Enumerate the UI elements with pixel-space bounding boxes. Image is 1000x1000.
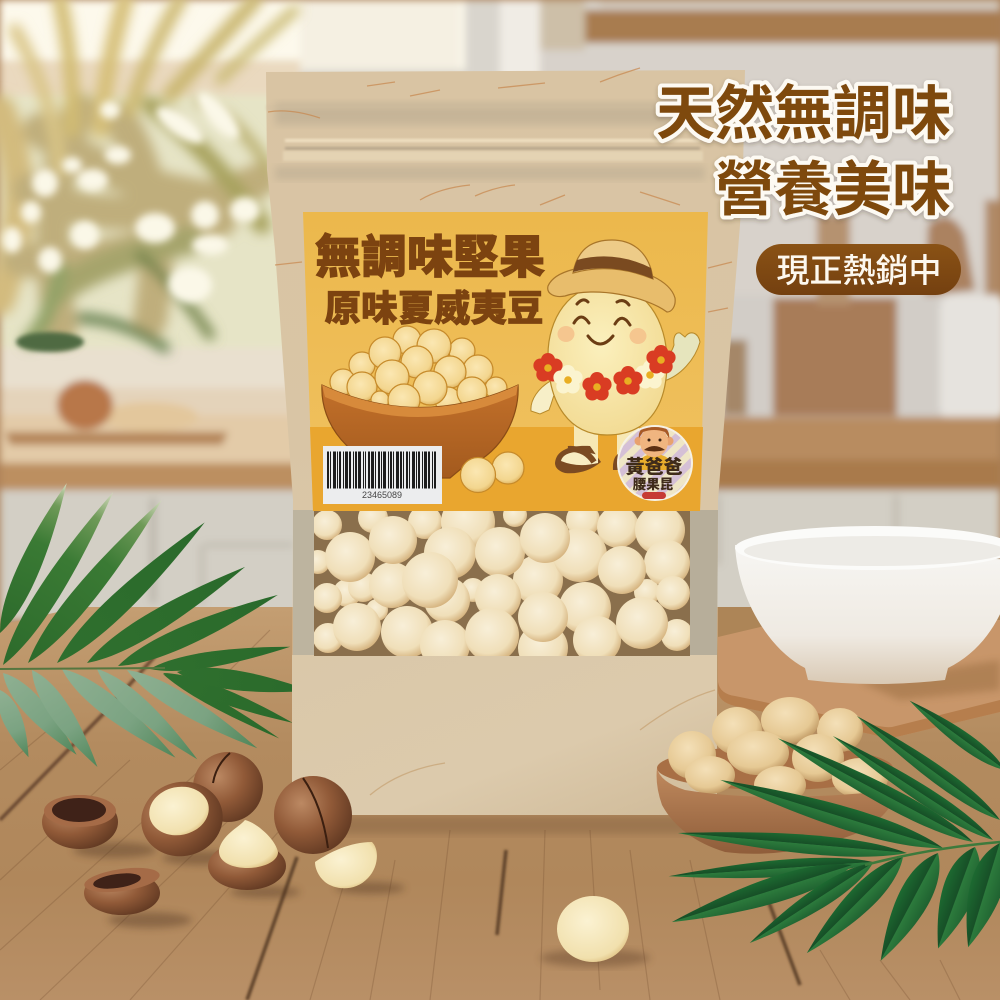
- cartoon bowl of nuts: [322, 326, 518, 478]
- bag body: [266, 70, 745, 815]
- small shell: [83, 864, 161, 915]
- tagline line 2: 營養美味: [715, 157, 951, 223]
- barcode: 23465089: [362, 490, 402, 500]
- cup shell with kernel: [208, 820, 286, 890]
- logo character: [634, 424, 676, 470]
- bag window with nuts: [314, 511, 690, 656]
- product label: [303, 212, 708, 511]
- blurred palm plant top left: [0, 0, 295, 352]
- background: blurred kitchen: [0, 0, 1000, 620]
- macadamia nut group: [42, 752, 629, 962]
- mascot left arm: [531, 380, 556, 414]
- mascot hat: [548, 240, 675, 312]
- half shell with kernel: [133, 773, 231, 865]
- bag zipper seal: [266, 103, 746, 180]
- mascot flower lei: [533, 345, 676, 400]
- loose cartoon nuts: [460, 452, 524, 492]
- white bowl: [735, 526, 1000, 700]
- badge: now on sale: [756, 244, 961, 295]
- mascot body: [548, 285, 667, 435]
- cutting board: [718, 620, 1000, 738]
- whole nut back: [193, 752, 263, 822]
- empty shell: [42, 795, 118, 849]
- logo name: 黃爸爸: [625, 455, 683, 478]
- barcode: [323, 446, 442, 504]
- mascot right arm: [664, 333, 700, 381]
- product bag: [266, 68, 746, 815]
- label subheading: 原味夏威夷豆: [324, 288, 544, 329]
- loose kernel: [315, 842, 377, 888]
- single shelled nut: [557, 896, 629, 962]
- badge: now on sale: 現正熱銷中: [776, 252, 942, 289]
- mascot face: [558, 300, 646, 344]
- lower bag panel: [292, 655, 717, 815]
- shadows: [73, 842, 405, 928]
- palm branch right: [668, 694, 1000, 968]
- tagline line 1: 天然無調味: [656, 81, 951, 147]
- label heading: 無調味堅果: [315, 231, 545, 283]
- label background: [303, 212, 708, 511]
- wooden bowl of nuts: [657, 697, 895, 854]
- mascot legs and sandals: [555, 425, 640, 473]
- brand logo badge: [617, 424, 693, 501]
- logo candy: [642, 492, 666, 499]
- tagline: [656, 81, 951, 223]
- label floor: [310, 427, 703, 511]
- wooden table: [0, 607, 1000, 1000]
- mascot: [531, 240, 700, 473]
- palm branch left: [0, 479, 312, 773]
- whole nut front: [274, 776, 352, 854]
- logo subname: 腰果昆: [633, 477, 674, 492]
- window sides: [293, 510, 718, 656]
